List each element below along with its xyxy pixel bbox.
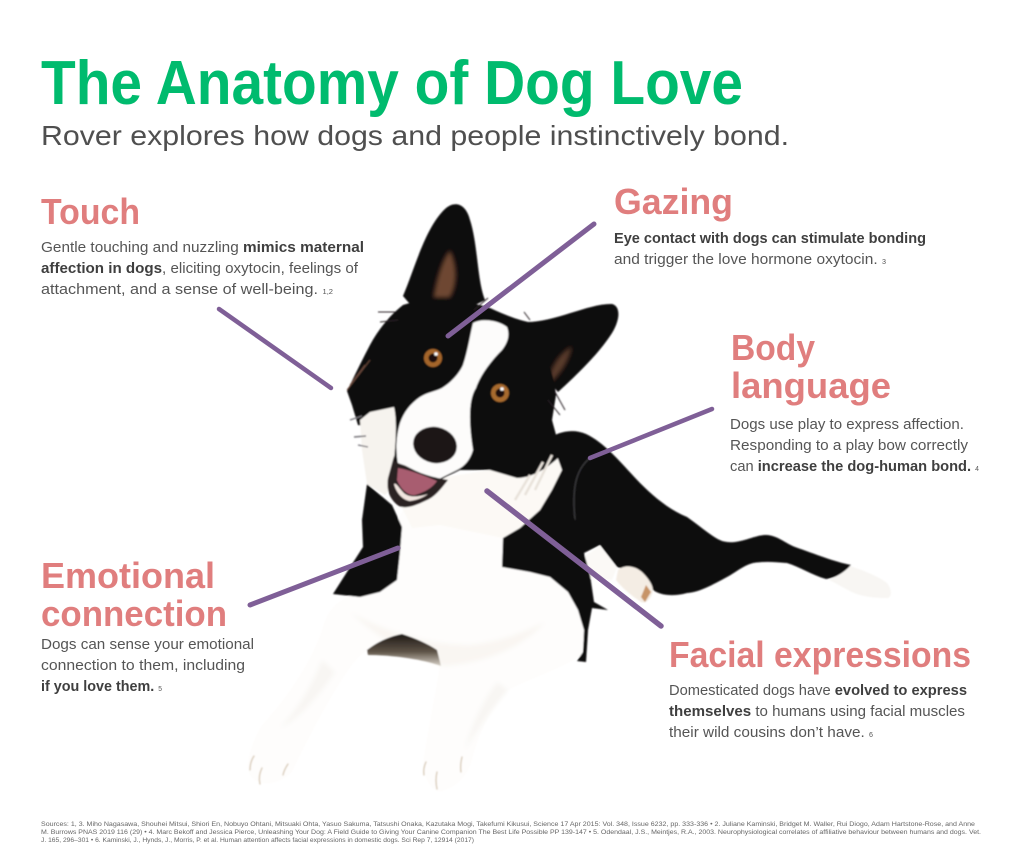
title: The Anatomy of Dog Love	[41, 49, 743, 118]
text: emotional connection body: connection to them, including	[41, 657, 245, 674]
panel: touch	[41, 191, 364, 298]
dog left cheek	[360, 407, 398, 495]
sources footnote: J. 165, 296–301 • 6. Kaminski, J., Hynds, J., Morris, P. et al. Human attention affects facial expressions in domestic dogs. Sci Rep 7, 12914 (2017)	[41, 837, 474, 844]
text: gazing body: and trigger the love hormone oxytocin. 3	[614, 251, 886, 268]
dog tail tip	[829, 566, 891, 598]
dog left eye	[424, 349, 442, 367]
dog white blaze and muzzle	[396, 320, 508, 480]
sources footnote: M. Burrows PNAS 2019 116 (29) • 4. Marc Bekoff and Jessica Pierce, Unleashing Your Dog: A Field Guide to Giving Your Canine Companion The Best Life Possible PP 139-147 • 5. Odendaal, J.S., Meintjes, R.A., 2003. Neurophysiological correlates of affiliative behaviour between humans and dogs. Vet.	[41, 829, 981, 836]
text: body language body: Responding to a play bow correctly	[730, 437, 969, 454]
text: emotional connection body	[41, 636, 254, 695]
text: touch body: affection in dogs, eliciting oxytocin, feelings of	[41, 260, 359, 277]
dog cheek grey streaks	[350, 416, 368, 447]
pointer: facial expressions	[487, 491, 661, 626]
text: facial expressions body	[669, 682, 967, 741]
heading: emotional connection: connection	[41, 593, 227, 634]
text: emotional connection body: if you love them. 5	[41, 678, 162, 695]
dog right ear inner	[548, 346, 572, 382]
photo: border collie	[248, 204, 891, 791]
heading: body language: language	[731, 365, 891, 406]
text: body language body: Dogs use play to express affection.	[730, 416, 964, 433]
text: emotional connection body: Dogs can sense your emotional	[41, 636, 254, 653]
text: facial expressions body: Domesticated dogs have evolved to express	[669, 682, 967, 699]
sources footnote	[41, 821, 981, 844]
subtitle: Rover explores how dogs and people instinctively bond.	[41, 120, 789, 151]
text: body language body: can increase the dog-human bond. 4	[730, 458, 979, 475]
text: gazing body	[614, 230, 926, 268]
panel: emotional connection	[41, 555, 254, 695]
heading: touch: Touch	[41, 191, 140, 232]
dog neck ruff	[388, 445, 562, 538]
heading: gazing: Gazing	[614, 181, 733, 222]
text: touch body	[41, 239, 364, 298]
pointer: emotional connection	[250, 548, 398, 605]
dog left ear	[403, 204, 485, 318]
text: touch body: attachment, and a sense of well-being. 1,2	[41, 281, 333, 298]
text: facial expressions body: themselves to humans using facial muscles	[669, 703, 965, 720]
panel: facial expressions	[669, 634, 971, 741]
text: gazing body: Eye contact with dogs can stimulate bonding	[614, 230, 926, 247]
dog right eye	[491, 384, 509, 402]
dog nose	[410, 423, 460, 467]
text: touch body: Gentle touching and nuzzling mimics maternal	[41, 239, 364, 256]
dog right ear	[527, 304, 618, 392]
dog hind paw	[616, 566, 653, 603]
dog left chest patch	[333, 484, 402, 597]
heading: body language: Body	[731, 327, 815, 368]
dog mouth	[387, 456, 448, 507]
pointer: touch	[219, 309, 331, 388]
dog toes	[250, 756, 462, 789]
heading: facial expressions: Facial expressions	[669, 634, 971, 675]
dog shoulder contour	[574, 458, 590, 520]
dog ruff streaks	[515, 455, 552, 500]
heading: emotional connection	[41, 555, 227, 634]
dog black back and hind leg	[503, 431, 851, 595]
panel: gazing	[614, 181, 926, 268]
dog left ear inner	[433, 250, 456, 298]
dog white body and legs	[248, 470, 586, 791]
text: facial expressions body: their wild cousins don’t have. 6	[669, 724, 873, 741]
heading: body language	[731, 327, 891, 406]
pointer: gazing	[448, 224, 594, 336]
dog head fur wisps	[347, 298, 565, 415]
dog head	[347, 300, 558, 490]
sources footnote: Sources: 1, 3. Miho Nagasawa, Shouhei Mitsui, Shiori En, Nobuyo Ohtani, Mitsuaki Ohta, Yasuo Sakuma, Tatsushi Onaka, Kazutaka Mogi, Takefumi Kikusui, Science 17 Apr 2015: Vol. 348, Issue 6232, pp. 333-336 • 2. Juliane Kaminski, Bridget M. Waller, Rui Diogo, Adam Hartstone-Rose, and Anne	[41, 821, 975, 828]
dog right chest patch and feathers	[502, 480, 608, 662]
panel: body language	[730, 327, 979, 475]
dog belly shadow	[367, 634, 441, 666]
pointer: body language	[590, 409, 712, 458]
heading: emotional connection: Emotional	[41, 555, 215, 596]
text: body language body	[730, 416, 979, 475]
